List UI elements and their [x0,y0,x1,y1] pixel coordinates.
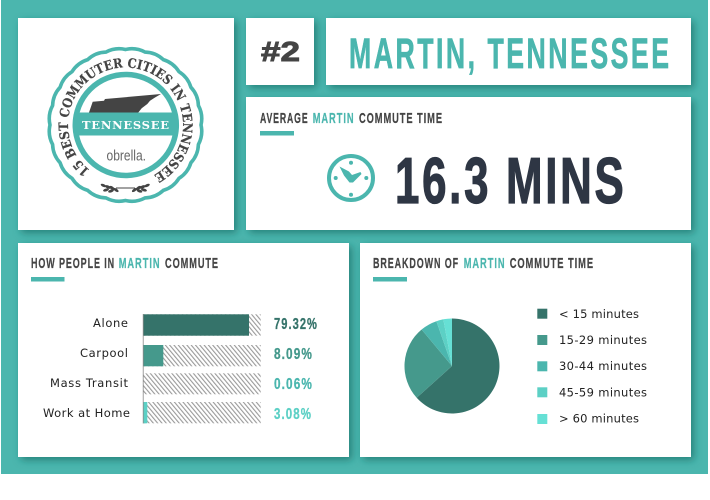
badge: banner [70,112,182,136]
panel: rank [246,18,314,85]
heading [373,255,594,272]
badge: inner ring [75,74,176,176]
heading: COMMUTE TIME [510,255,594,272]
legend [537,307,647,426]
heading: BREAKDOWN OF [373,255,459,272]
panel: badge [17,17,241,237]
bar chart: Alone [93,316,128,330]
bar chart: 0.06% [274,376,313,393]
heading [260,110,443,127]
heading underline [373,277,407,282]
heading underline [31,277,64,282]
heading: MARTIN [119,255,160,272]
bar chart: 79.32% [274,316,318,333]
bar chart: Mass Transit [50,376,128,390]
badge: scalloped outer ring [49,49,202,201]
rank number: #2 [261,36,300,67]
bar chart [43,314,318,424]
heading: AVERAGE [260,110,308,127]
badge: banner text: TENNESSEE [82,118,169,132]
icon: clock [329,156,373,200]
badge: obrella logo: obrella. [106,148,146,164]
icon: laurels [100,183,150,193]
panel: how people commute [18,243,349,457]
panel: city title [326,18,691,85]
heading: COMMUTE TIME [359,110,443,127]
panel: commute time breakdown [360,243,691,457]
heading: MARTIN [313,110,354,127]
legend: < 15 minutes [559,307,639,321]
legend: 30-44 minutes [559,359,647,373]
pie chart [404,318,499,414]
bar chart: 8.09% [274,346,313,363]
legend: > 60 minutes [559,412,639,426]
bar chart: 3.08% [274,406,312,423]
heading: MARTIN [464,255,506,272]
heading: COMMUTE [165,255,219,272]
panel: average commute time [246,97,691,230]
legend: 15-29 minutes [559,333,647,347]
bar chart: Carpool [80,346,128,360]
heading underline [260,131,294,136]
legend: 45-59 minutes [559,386,647,400]
icon: Tennessee state map [89,94,161,112]
heading: HOW PEOPLE IN [31,255,115,272]
badge: curved text: 15 BEST COMMUTER CITIES IN TENNESSEE [58,58,193,183]
bar chart: Work at Home [43,406,130,420]
